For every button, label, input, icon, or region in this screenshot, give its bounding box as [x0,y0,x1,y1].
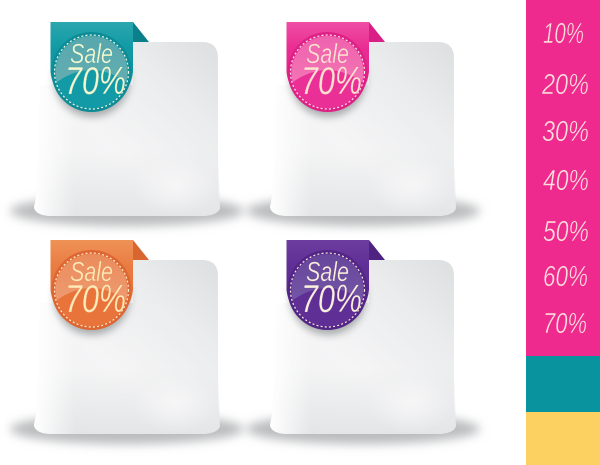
card: teal sale tag [10,22,244,226]
badge text [301,256,362,321]
card: purple sale tag [246,240,480,444]
badge text [65,38,126,103]
paper with shadow [246,42,480,226]
paper with shadow [10,42,244,226]
percentage labels: 20% [541,69,589,101]
paper with shadow [10,260,244,444]
badge text [65,256,126,321]
ribbon [50,240,149,335]
percentage labels: 30% [542,116,589,148]
ribbon [50,22,149,117]
percentage labels: 60% [543,261,588,293]
badge text [301,38,362,103]
ribbon [286,240,385,335]
badge text: Sale [306,256,349,287]
badge [52,32,132,112]
percentage labels: 40% [543,165,589,197]
card: pink sale tag [246,22,480,226]
badge [288,32,368,112]
percentage labels [541,18,589,340]
badge text: 70% [301,60,362,103]
percentage labels: 50% [543,216,589,248]
badge [52,250,132,330]
ribbon [286,22,385,117]
colour swatch column [526,0,600,465]
percentage labels: 10% [543,18,584,50]
badge text: 70% [301,278,362,321]
badge text: 70% [65,278,126,321]
badge text: Sale [306,38,349,69]
paper with shadow [246,260,480,444]
badge [288,250,368,330]
card: orange sale tag [10,240,244,444]
swatch: teal [526,356,600,412]
swatch: pink [526,0,600,356]
badge text: Sale [70,38,113,69]
percentage labels: 70% [543,308,587,340]
badge text: Sale [70,256,113,287]
swatch: yellow [526,412,600,465]
badge text: 70% [65,60,126,103]
